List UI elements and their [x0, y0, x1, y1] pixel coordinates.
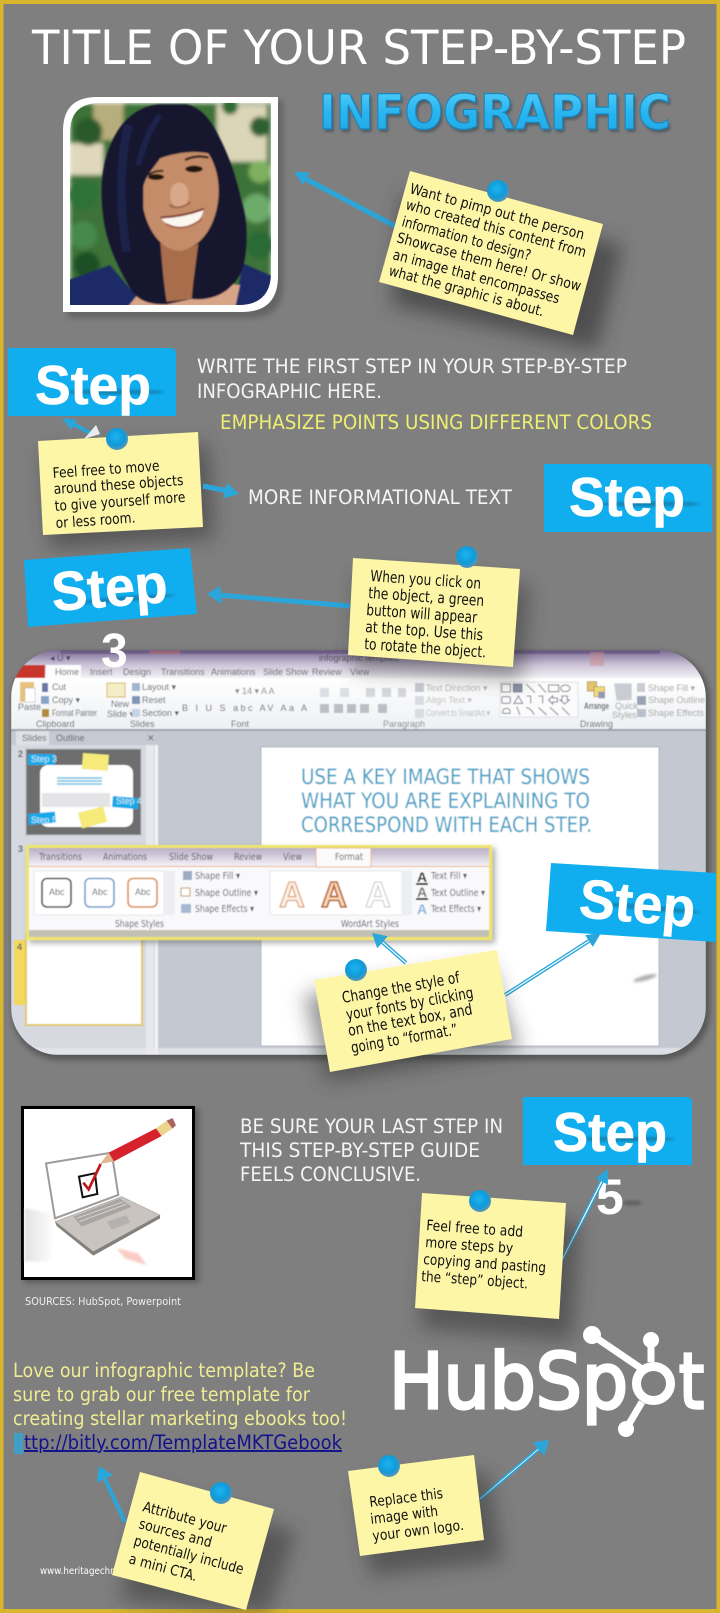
step 3 badge — [24, 548, 197, 627]
file tab — [11, 665, 45, 679]
slide thumbnail: Step 5 — [31, 815, 57, 825]
ribbon tabs: Slide Show — [263, 667, 309, 677]
shape styles: Abc — [135, 887, 151, 897]
sticky note: move objects: Feel free to move — [52, 459, 160, 482]
arrow: note to format ribbon — [372, 933, 406, 963]
check box — [79, 1173, 97, 1197]
wordart styles: A — [321, 874, 347, 915]
format tabs: Review — [234, 852, 262, 863]
last step text: BE SURE YOUR LAST STEP IN — [240, 1115, 503, 1138]
step 1 badge: Step — [35, 354, 151, 416]
drawing group: Quick — [615, 701, 639, 711]
sticky note: add more steps: Feel free to add — [426, 1218, 524, 1241]
nose highlight — [170, 182, 189, 208]
font group — [182, 686, 307, 729]
slides group: Reset — [142, 695, 166, 705]
shape styles: Shape Fill ▾ — [195, 871, 240, 882]
drawing group: Shape Outline ▾ — [648, 695, 713, 705]
paragraph group: Paragraph — [383, 719, 425, 729]
slides pane: 3 — [18, 844, 23, 854]
last step text — [239, 1115, 503, 1186]
ribbon tabs — [46, 665, 370, 679]
slides pane — [11, 731, 158, 1055]
number 5 — [596, 1169, 642, 1225]
quick access icons: ◂ U ▾ — [50, 653, 71, 663]
paragraph group: Align Text ▾ — [426, 695, 472, 705]
sticky note: change font style: Change the style of — [341, 968, 461, 1007]
sticky note: rotate object: at the top. Use this — [365, 618, 484, 644]
step 4 badge: Step — [577, 867, 698, 939]
clipboard group: Cut — [52, 682, 67, 692]
sticky note: add more steps: more steps by — [425, 1235, 514, 1257]
drawing group: Styles ▾ — [612, 710, 644, 720]
subtitle: INFOGRAPHIC: INFOGRAPHIC — [319, 85, 671, 141]
HubSpot logo: HubSp — [389, 1338, 628, 1427]
paragraph group: Convert to SmartArt ▾ — [426, 708, 490, 718]
sticky note: change font style: your fonts by clicking — [345, 984, 475, 1024]
format tabs: Transitions — [38, 852, 82, 863]
arrow: note to step 4 — [505, 933, 601, 995]
slides group: New — [111, 699, 130, 709]
step 3 badge: Step — [49, 552, 170, 623]
shape styles: Abc — [92, 887, 108, 897]
clipboard group — [18, 682, 97, 729]
laptop base — [55, 1197, 160, 1252]
call to action text: Love our infographic template? Be — [13, 1359, 315, 1382]
ribbon tabs: Animations — [211, 667, 256, 677]
shape styles: Shape Styles — [115, 919, 164, 930]
step 1 text: WRITE THE FIRST STEP IN YOUR STEP-BY-STEP — [197, 355, 627, 378]
last step text: THIS STEP-BY-STEP GUIDE — [239, 1139, 480, 1162]
step 4 badge — [546, 863, 716, 942]
slides group: Slide ▾ — [107, 709, 135, 719]
hair — [102, 104, 247, 304]
HubSpot logo — [389, 1326, 704, 1437]
screenshot panel: PowerPoint window — [11, 650, 713, 1060]
wordart styles: WordArt Styles — [341, 919, 399, 930]
drawing group — [500, 682, 713, 729]
wordart styles: Text Outline ▾ — [430, 888, 485, 899]
foliage background — [68, 99, 274, 305]
slides pane: Slides — [22, 733, 47, 743]
wordart styles: A — [417, 901, 427, 917]
HubSpot logo: t — [679, 1338, 704, 1427]
number 5: 5 — [596, 1169, 624, 1225]
arrow: note to informational text — [203, 483, 239, 498]
sticky note: attribute sources: sources and — [137, 1516, 214, 1551]
paragraph group — [320, 683, 490, 729]
title: TITLE OF YOUR STEP-BY-STEP — [31, 21, 686, 76]
sticky note: replace logo: Replace this — [369, 1486, 444, 1511]
ribbon tabs: Home — [55, 667, 79, 677]
step 1 text: INFOGRAPHIC HERE. — [197, 380, 382, 403]
format ribbon inset — [28, 846, 495, 943]
format tabs — [38, 848, 371, 867]
floor shading — [25, 1208, 55, 1262]
last step text: FEELS CONCLUSIVE. — [240, 1163, 421, 1186]
main slide — [261, 747, 659, 1046]
call to action text: ttp://bitly.com/TemplateMKTGebook — [24, 1431, 343, 1454]
subtitle: INFOGRAPHIC: INFOGRAPHIC — [321, 88, 673, 144]
wordart styles: Text Fill ▾ — [430, 871, 467, 882]
sticky note: change font style — [304, 950, 520, 1082]
slide text: USE A KEY IMAGE THAT SHOWS — [301, 765, 590, 789]
sticky note: rotate object: to rotate the object. — [364, 635, 487, 662]
sticky note: pimp out the person: Want to pimp out the person — [408, 181, 586, 243]
sticky note: rotate object — [348, 546, 530, 680]
wordart styles — [270, 869, 485, 930]
window title: infographic template — [319, 653, 400, 663]
shape styles: Shape Outline ▾ — [195, 888, 258, 899]
slides group: Section ▾ — [142, 708, 180, 718]
sticky note: move objects — [38, 425, 214, 548]
clipboard group: Clipboard — [36, 719, 75, 729]
step 2 badge: Step — [569, 466, 685, 528]
shape styles: Shape Effects ▾ — [195, 904, 254, 915]
sticky note: pimp out the person: Showcase them here! Or show — [395, 230, 583, 295]
laptop checklist image — [22, 1108, 199, 1283]
pin — [487, 180, 509, 202]
slides pane: 2 — [18, 749, 23, 759]
sticky note: pimp out the person: an image that encompasses — [391, 247, 561, 307]
sticky note: pimp out the person — [379, 171, 622, 350]
sticky note: attribute sources — [112, 1472, 296, 1613]
pin — [345, 959, 367, 981]
sticky note: attribute sources: a mini CTA. — [127, 1551, 199, 1585]
sticky note: attribute sources: potentially include — [132, 1533, 245, 1578]
sticky note: replace logo: your own logo. — [372, 1518, 465, 1545]
slide text — [301, 765, 592, 837]
slides group — [107, 682, 180, 729]
sticky note: replace logo — [348, 1455, 502, 1576]
laptop screen — [46, 1153, 118, 1218]
ribbon tabs: Review — [312, 667, 342, 677]
paragraph group: Text Direction ▾ — [426, 683, 488, 693]
slide thumbnail: Step 3 — [31, 754, 57, 764]
slide text: CORRESPOND WITH EACH STEP. — [301, 813, 592, 837]
drawing group: Arrange — [584, 701, 609, 711]
slides pane: ✕ — [147, 733, 155, 743]
face — [143, 152, 219, 251]
sweater — [70, 264, 137, 305]
font group: Font — [231, 719, 250, 729]
slide 4 thumbnail — [26, 935, 142, 1025]
wordart styles: A — [365, 874, 391, 915]
clipboard group: Paste — [18, 702, 41, 712]
step 5 badge — [523, 1097, 692, 1165]
wordart styles: A — [417, 884, 427, 900]
call to action text: sure to grab our free template for — [13, 1383, 311, 1406]
drawing group: Shape Fill ▾ — [648, 683, 696, 693]
ribbon tabs: View — [350, 667, 370, 677]
arrow: note to photo — [294, 172, 395, 226]
call to action text: creating stellar marketing ebooks too! — [13, 1407, 347, 1430]
ribbon — [11, 678, 706, 729]
sticky note: rotate object: button will appear — [366, 601, 478, 627]
arrow: note to call to action — [97, 1466, 125, 1522]
eyes — [185, 166, 203, 172]
ribbon tabs: Insert — [90, 667, 113, 677]
ribbon tabs: Design — [123, 667, 151, 677]
sticky note: pimp out the person: information to design? — [400, 214, 533, 264]
arrow: note to step 5 — [562, 1169, 608, 1260]
pin — [378, 1455, 400, 1477]
photo of author — [63, 97, 283, 318]
font group: B I U S abc AV Aa A — [182, 703, 307, 713]
pin — [106, 428, 128, 450]
pin — [210, 1482, 232, 1504]
sticky note: pimp out the person: who created this content from — [404, 197, 588, 261]
number 3: 3 — [101, 625, 128, 678]
arrow: note to logo — [480, 1440, 549, 1499]
step 2 badge — [544, 464, 712, 532]
sticky note: move objects: to give yourself more — [54, 490, 186, 515]
sticky note: attribute sources: Attribute your — [141, 1499, 228, 1537]
sticky note: rotate object: When you click on — [370, 567, 482, 593]
chest — [128, 282, 242, 305]
mouth — [161, 209, 204, 228]
sticky note: rotate object: the object, a green — [368, 584, 485, 610]
slides group: Layout ▾ — [142, 682, 177, 692]
arrow: note to step 3 — [207, 586, 350, 606]
ribbon tabs: Transitions — [161, 667, 205, 677]
drawing group: Drawing — [580, 719, 613, 729]
informational text: MORE INFORMATIONAL TEXT — [248, 486, 512, 509]
arrow: note to step 1 — [62, 418, 90, 433]
sticky note: add more steps: the “step” object. — [421, 1269, 529, 1292]
pin — [469, 1190, 491, 1212]
sources: SOURCES: HubSpot, Powerpoint — [25, 1295, 182, 1308]
drawing group: Shape Effects ▾ — [648, 708, 711, 718]
sticky note: pimp out the person: what the graphic is about. — [387, 263, 546, 320]
slide thumbnail — [26, 749, 142, 835]
brows — [185, 156, 208, 160]
format tabs: Format — [335, 852, 363, 863]
pencil — [100, 1153, 114, 1164]
sticky note: move objects: or less room. — [55, 510, 136, 532]
step 1 text — [197, 355, 627, 403]
watermark: www.heritagechristiancollege.com — [40, 1566, 190, 1577]
sticky note: move objects: around these objects — [53, 473, 184, 498]
shape styles — [34, 871, 258, 930]
wordart styles: Text Effects ▾ — [430, 904, 481, 915]
shape styles: Abc — [49, 887, 65, 897]
step 5 badge: Step — [553, 1101, 667, 1163]
sticky note: add more steps: copying and pasting — [423, 1252, 547, 1277]
clipboard group: Copy ▾ — [52, 695, 81, 705]
slides pane: Outline — [56, 733, 85, 743]
step 1 badge — [8, 348, 176, 416]
pin — [456, 546, 478, 568]
format tabs: View — [283, 852, 302, 863]
clipboard group: Format Painter — [52, 708, 97, 718]
sticky note: change font style: going to “format.” — [350, 1020, 459, 1057]
slide text: WHAT YOU ARE EXPLAINING TO — [301, 789, 590, 813]
slide thumbnail: Step 4 — [116, 796, 142, 806]
sticky note: replace logo: image with — [370, 1504, 439, 1528]
call to action text — [13, 1359, 347, 1454]
slides group: Slides — [130, 719, 155, 729]
font group: ▾ 14 ▾ A A — [235, 686, 275, 696]
wordart styles: A — [279, 874, 305, 915]
sticky note: change font style: on the text box, and — [347, 1000, 474, 1040]
emphasis text: EMPHASIZE POINTS USING DIFFERENT COLORS — [220, 411, 652, 434]
sticky note: add more steps — [415, 1190, 580, 1340]
wordart styles: A — [417, 869, 427, 885]
neck — [160, 238, 198, 302]
format tabs: Slide Show — [169, 852, 213, 863]
format tabs: Animations — [103, 852, 147, 863]
slides pane: 4 — [17, 942, 22, 952]
